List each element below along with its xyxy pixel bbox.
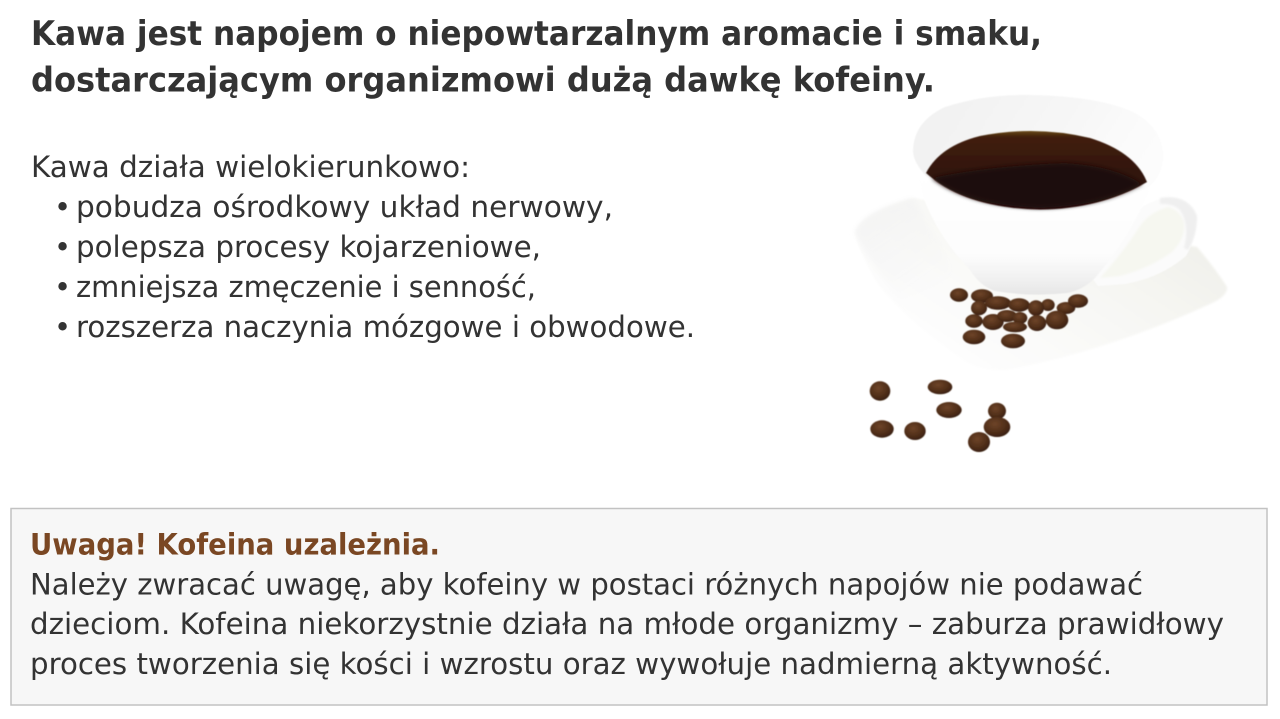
heading: Kawa jest napojem o niepowtarzalnym aromacie i smaku, (31, 14, 1042, 53)
text block: effects of coffee: pobudza ośrodkowy układ nerwowy, (76, 190, 613, 224)
text block: effects of coffee: polepsza procesy kojarzeniowe, (76, 230, 541, 264)
heading: dostarczającym organizmowi dużą dawkę kofeiny. (31, 60, 935, 100)
cup handle (1092, 197, 1197, 286)
image: coffee cup on saucer with beans (855, 95, 1227, 452)
text block: effects of coffee: zmniejsza zmęczenie i senność, (76, 270, 536, 304)
cup body (913, 150, 1164, 295)
callout body: dzieciom. Kofeina niekorzystnie działa na młode organizmy – zaburza prawidłowy (30, 607, 1224, 641)
loose beans (870, 380, 1010, 452)
text block: effects of coffee: • (54, 230, 71, 264)
callout body: Należy zwracać uwagę, aby kofeiny w postaci różnych napojów nie podawać (30, 568, 1143, 602)
beans on saucer (950, 288, 1088, 348)
text block: effects of coffee: • (54, 270, 71, 304)
coffee surface (926, 131, 1147, 210)
saucer (855, 198, 1227, 370)
callout body (30, 568, 1224, 681)
callout: warning (11, 508, 1267, 705)
text block: effects of coffee: Kawa działa wielokierunkowo: (31, 150, 470, 184)
callout body: proces tworzenia się kości i wzrostu oraz wywołuje nadmierną aktywność. (30, 647, 1112, 681)
text block: effects of coffee: • (54, 190, 71, 224)
text block: effects of coffee (31, 150, 695, 344)
heading (31, 14, 1042, 100)
text block: effects of coffee: • (54, 310, 71, 344)
cup rim and interior (913, 95, 1163, 211)
callout heading: Uwaga! Kofeina uzależnia. (30, 528, 440, 562)
text block: effects of coffee: rozszerza naczynia mózgowe i obwodowe. (76, 310, 695, 344)
